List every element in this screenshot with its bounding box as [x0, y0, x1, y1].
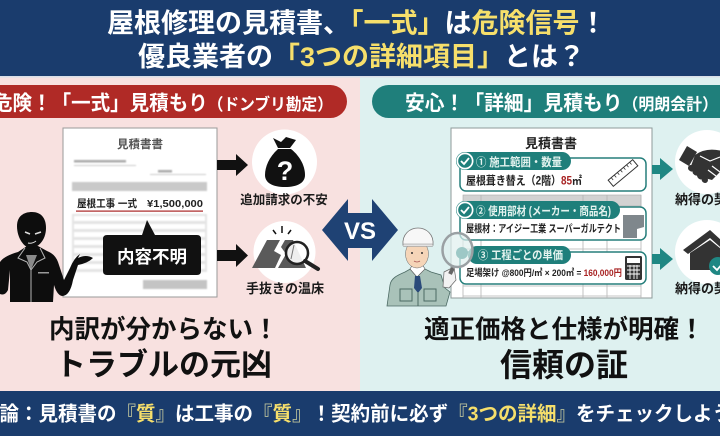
icon: money bag with question mark	[252, 130, 317, 194]
callout: contents unknown: 内容不明	[117, 247, 187, 267]
right conclusion: 信頼の証	[500, 347, 628, 383]
item 2: materials used	[456, 201, 646, 240]
summary text: right: 適正価格と仕様が明確！	[424, 315, 705, 344]
arrow: to extra charge worry	[217, 154, 248, 176]
item 1: construction scope	[456, 152, 646, 191]
highlighted amount: ¥1,500,000	[147, 198, 203, 210]
document: lump-sum estimate	[63, 128, 217, 297]
icon: house with check	[675, 220, 720, 284]
header band	[0, 0, 720, 78]
arrow: to satisfied contract bottom	[652, 248, 673, 270]
item 3: unit prices	[460, 246, 646, 284]
item 1: construction scope: ① 施工範囲・数量	[476, 155, 562, 169]
item 1: construction scope: 屋根葺き替え（2階）85㎡	[466, 174, 582, 188]
icon: handshake	[675, 130, 720, 194]
summary text: left	[49, 315, 279, 382]
table background	[463, 195, 641, 298]
document title: 見積書書	[117, 137, 163, 151]
icon: money bag with question mark: ?	[277, 156, 293, 186]
summary text: left: 内訳が分からない！	[49, 315, 279, 344]
document: detailed estimate	[451, 128, 652, 298]
item 3: unit prices: 足場架け @800円/㎡ × 200㎡ = 160,000円	[466, 267, 622, 279]
document title: 見積書書	[525, 136, 577, 151]
icon: calculator	[625, 256, 642, 280]
arrow: to poor workmanship	[217, 244, 248, 267]
heading pill: safe	[372, 85, 720, 118]
heading pill: danger: 危険！「一式」見積もり（ドンブリ勘定）	[0, 91, 333, 115]
arrow: to satisfied contract top	[652, 158, 673, 180]
footer band	[0, 391, 720, 436]
highlighted row: 屋根工事 一式	[77, 197, 137, 210]
title line 2: 優良業者の「3つの詳細項目」とは？	[138, 42, 585, 72]
item 2: materials used: 屋根材：アイジー工業 スーパーガルテクト	[466, 222, 621, 235]
title line 1: 屋根修理の見積書、「一式」は危険信号！	[107, 8, 606, 38]
summary text: right	[424, 315, 705, 383]
icon: ruler	[608, 160, 638, 186]
panel: left danger background	[0, 76, 360, 392]
VS text: VS	[344, 218, 376, 245]
label: poor workmanship: 手抜きの温床	[246, 281, 324, 296]
label: extra charge worry: 追加請求の不安	[240, 192, 328, 207]
icon: cracked roof and magnifier	[252, 221, 318, 283]
left conclusion: トラブルの元凶	[55, 348, 272, 382]
figure: inspector with magnifier	[387, 228, 472, 306]
heading pill: safe: 安心！「詳細」見積もり（明朗会計）	[405, 92, 718, 115]
heading pill: danger	[0, 85, 347, 118]
item 3: unit prices: ③ 工程ごとの単価	[478, 248, 563, 262]
VS badge	[322, 199, 398, 261]
item 2: materials used: ② 使用部材 (メーカー・商品名)	[476, 204, 611, 218]
callout: contents unknown	[103, 220, 201, 275]
figure: shady contractor silhouette	[0, 212, 93, 302]
panel: right safe background	[360, 76, 720, 392]
magnifier	[442, 233, 472, 274]
material swatch	[623, 215, 644, 238]
